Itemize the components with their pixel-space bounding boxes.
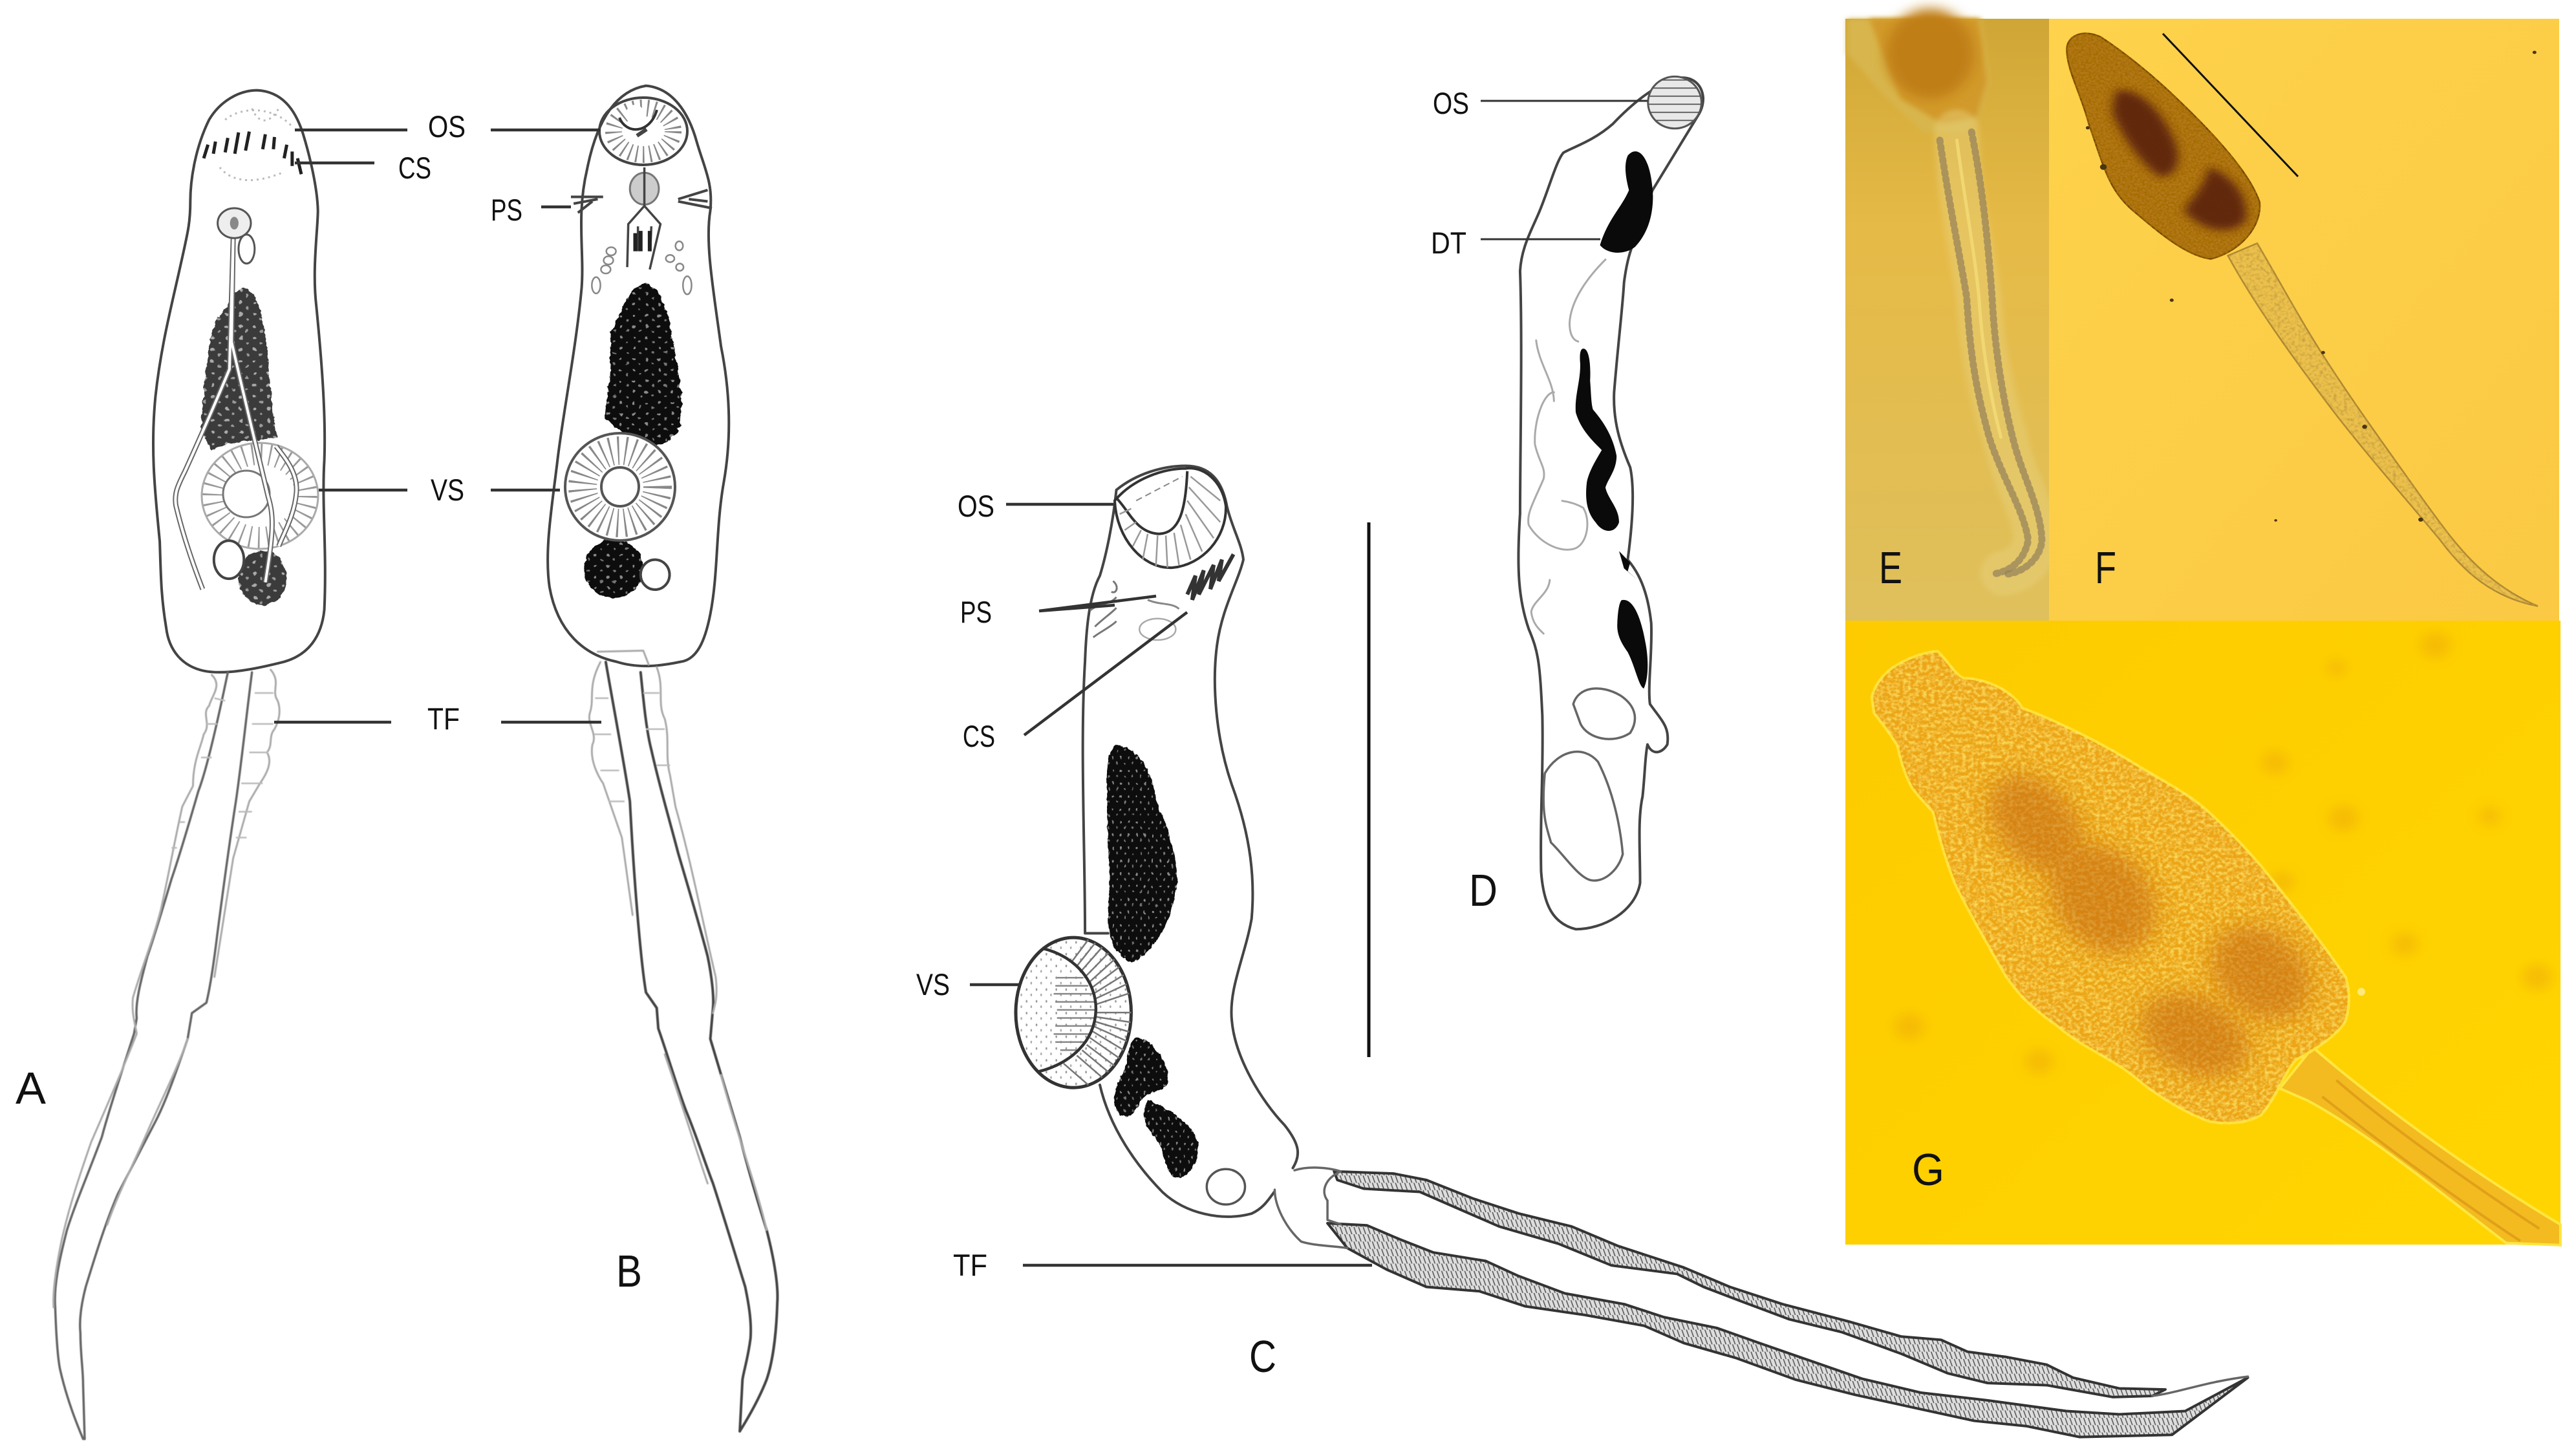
G tail inner lines bbox=[2322, 1080, 2539, 1241]
E tail bbox=[1940, 132, 2042, 574]
F dark organs bbox=[2112, 91, 2246, 230]
F body bbox=[2066, 34, 2260, 259]
C label CS: CS bbox=[963, 719, 995, 753]
C label OS line bbox=[1006, 503, 1113, 506]
C ventral sucker bbox=[1016, 937, 1131, 1087]
B label PS line bbox=[541, 206, 571, 208]
A label VS line bbox=[319, 489, 407, 491]
G small bubble bbox=[2357, 988, 2365, 996]
panel letter E: E bbox=[1879, 542, 1902, 593]
C scale bar bbox=[1367, 522, 1371, 1057]
D body outline bbox=[1518, 78, 1703, 929]
D label OS: OS bbox=[1433, 86, 1469, 120]
C label OS: OS bbox=[958, 489, 994, 523]
F tail bbox=[2228, 243, 2538, 606]
C label TF line bbox=[1023, 1264, 1372, 1267]
panel letter B: B bbox=[616, 1246, 642, 1296]
shared label: VS: VS bbox=[431, 473, 464, 507]
D label OS line bbox=[1481, 100, 1648, 102]
B label VS line bbox=[491, 489, 560, 491]
D oral sucker bbox=[1648, 76, 1701, 129]
panel letter D: D bbox=[1469, 865, 1497, 915]
shared label: TF: TF bbox=[427, 701, 460, 736]
C oral sucker bbox=[1115, 468, 1226, 568]
D label DT: DT bbox=[1431, 226, 1466, 260]
A ovary bbox=[214, 541, 244, 579]
A label OS line bbox=[295, 129, 407, 131]
C anterior testis bbox=[1107, 745, 1177, 963]
A label CS line bbox=[295, 162, 374, 164]
panel F: micrograph of whole cercaria bbox=[2049, 19, 2559, 621]
panel E: micrograph of tail bbox=[1845, 8, 2049, 621]
A ventral sucker bbox=[202, 443, 318, 549]
panel B: ventral line drawing bbox=[491, 86, 777, 1431]
panel D: lateral line drawing with duct tissue bbox=[1431, 76, 1703, 929]
C ovary bbox=[1207, 1169, 1245, 1204]
panel letter F: F bbox=[2095, 542, 2116, 593]
D internal organs (faint outlines) bbox=[1529, 259, 1635, 881]
B anterior testis bbox=[605, 283, 682, 445]
C posterior testis lobes bbox=[1114, 1036, 1198, 1177]
B body outline bbox=[548, 86, 729, 666]
panel letter G: G bbox=[1912, 1144, 1944, 1195]
shared label: CS: CS bbox=[398, 151, 431, 185]
G dark organs bbox=[1969, 759, 2332, 1095]
C label PS: PS bbox=[960, 595, 992, 629]
A gut bbox=[175, 208, 297, 589]
C body outline bbox=[1083, 466, 1298, 1217]
F background bbox=[2049, 19, 2559, 621]
C penetration spines and cyst area bbox=[1090, 554, 1234, 640]
B ventral sucker bbox=[565, 433, 675, 541]
G body bbox=[1872, 651, 2349, 1123]
D label DT line bbox=[1481, 238, 1600, 241]
G background blurred spots bbox=[1894, 632, 2552, 1074]
C label CS line bbox=[1024, 612, 1187, 735]
B label OS line bbox=[491, 129, 601, 131]
C label VS: VS bbox=[916, 967, 950, 1001]
C tail with hatched fins bbox=[1274, 1168, 2248, 1437]
panel G: micrograph close-up of body bbox=[1845, 621, 2560, 1245]
B posterior testis bbox=[585, 539, 643, 598]
F scale bar bbox=[2163, 34, 2298, 177]
shared label: OS: OS bbox=[428, 109, 466, 144]
A anterior testis bbox=[201, 288, 277, 451]
B pharynx, oesophagus and gland cells bbox=[592, 167, 692, 294]
B ovary bbox=[641, 560, 670, 590]
A head spines and dots bbox=[204, 109, 301, 180]
G background bbox=[1845, 621, 2560, 1245]
panel C: lateral line drawing bbox=[916, 466, 2248, 1437]
panel A: dorsal line drawing bbox=[54, 91, 407, 1439]
B label TF line bbox=[501, 721, 601, 723]
shared label: PS: PS bbox=[491, 193, 522, 227]
A label TF line bbox=[274, 721, 391, 723]
B penetration spines (PS) bbox=[571, 190, 712, 213]
A posterior testis bbox=[239, 551, 287, 605]
B oral sucker bbox=[599, 98, 687, 165]
G tail bbox=[2280, 1047, 2560, 1245]
panel letter C: C bbox=[1249, 1331, 1276, 1382]
C label TF: TF bbox=[953, 1248, 987, 1282]
panel letter A: A bbox=[16, 1063, 46, 1113]
C label VS line bbox=[970, 983, 1021, 986]
F specks bbox=[2086, 50, 2537, 522]
D dark duct segments bbox=[1576, 151, 1653, 689]
A body outline bbox=[153, 91, 325, 672]
B tail with fins bbox=[589, 650, 777, 1431]
E background bbox=[1845, 19, 2049, 621]
C label PS lines bbox=[1039, 596, 1156, 611]
E body fragment bbox=[1847, 8, 1990, 132]
A tail with fins bbox=[54, 670, 279, 1439]
